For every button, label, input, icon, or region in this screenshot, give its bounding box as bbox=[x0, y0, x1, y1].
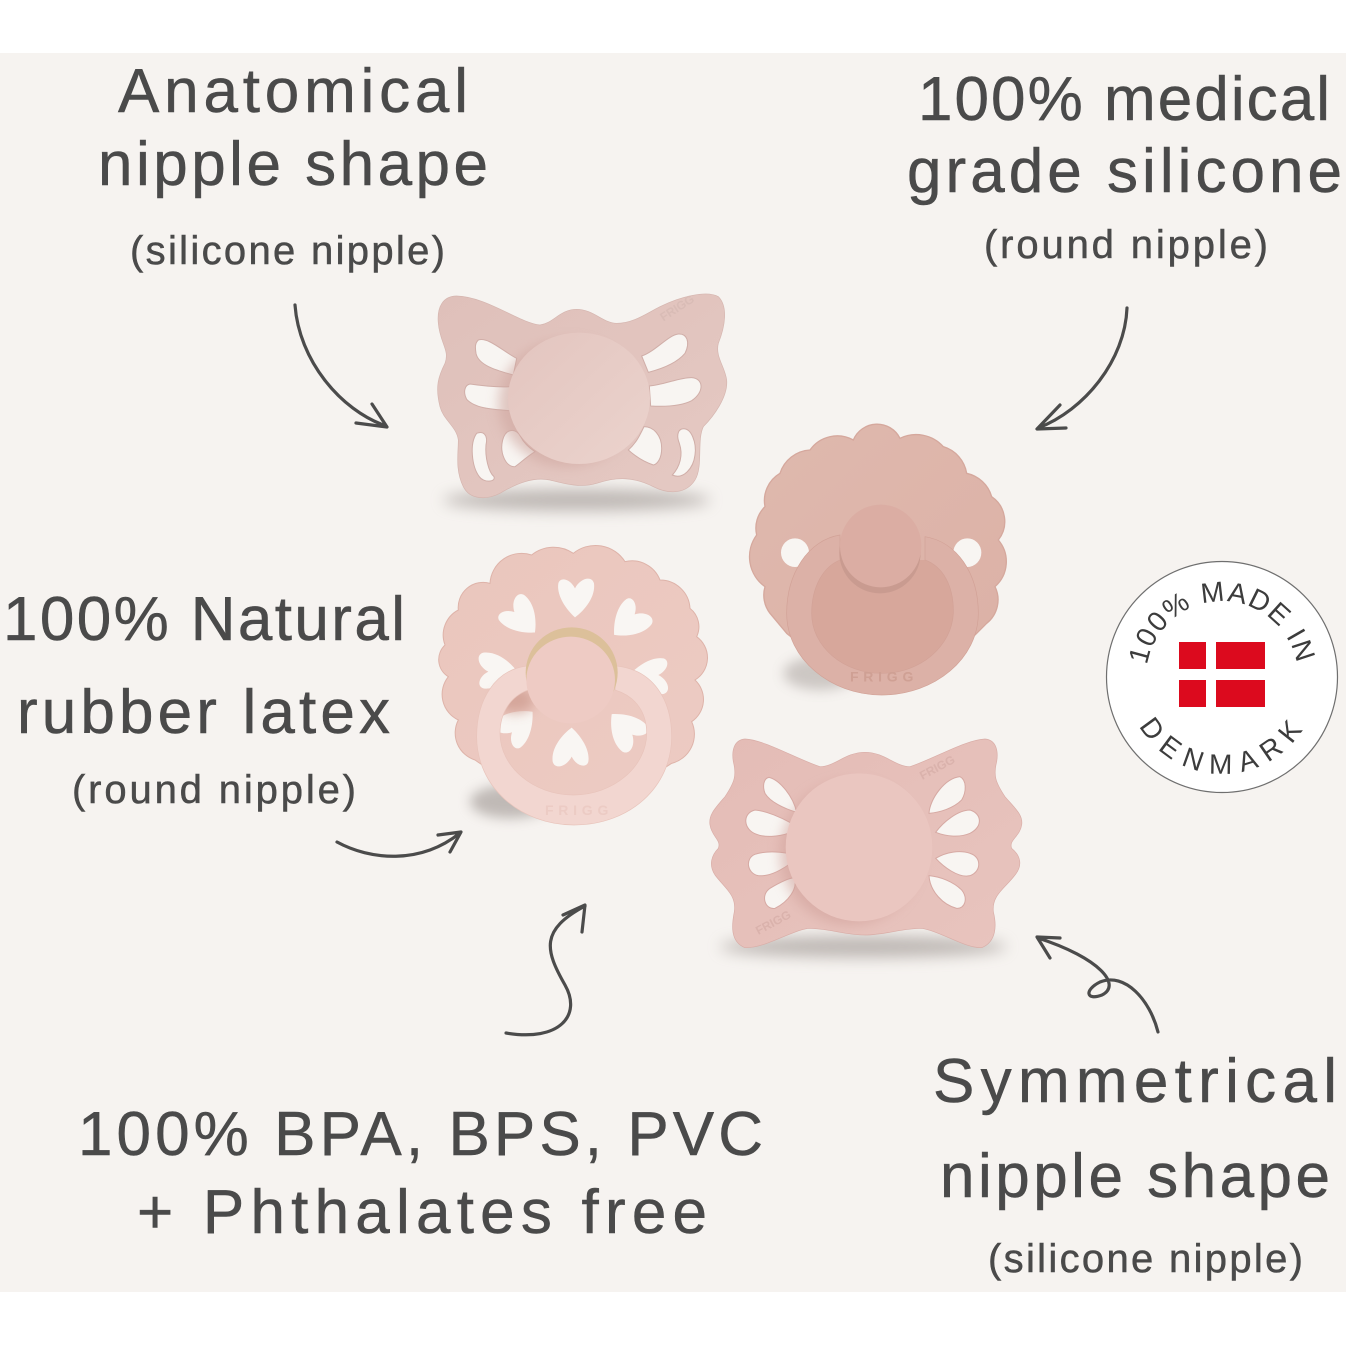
shield bbox=[750, 424, 1006, 673]
arrow: to butterfly pacifier bbox=[295, 305, 387, 427]
pacifier: butterfly bbox=[438, 292, 727, 511]
heading: BPA free: 100% BPA, BPS, PVC bbox=[78, 1100, 763, 1169]
button bbox=[526, 637, 615, 723]
heading: medical grade silicone: 100% medical bbox=[918, 65, 1330, 134]
arrow: to centre pacifiers bbox=[506, 905, 585, 1035]
shadow bbox=[720, 936, 1007, 957]
shadow bbox=[443, 489, 710, 511]
logo: FRIGG bbox=[850, 669, 913, 685]
badge top text: 100% MADE IN bbox=[1130, 582, 1315, 663]
badge circle bbox=[1106, 562, 1338, 792]
heading: medical grade silicone: (round nipple) bbox=[984, 223, 1268, 267]
nipple base bbox=[508, 333, 650, 464]
shield bbox=[710, 739, 1022, 948]
heading: anatomical nipple shape: (silicone nipple) bbox=[130, 229, 445, 273]
cut-outs bbox=[465, 334, 701, 481]
heading: symmetrical nipple shape bbox=[933, 1047, 1337, 1281]
heading: symmetrical nipple shape: (silicone nipple) bbox=[988, 1237, 1303, 1281]
heading: medical grade silicone: grade silicone bbox=[907, 137, 1342, 206]
heading: BPA free: + Phthalates free bbox=[137, 1178, 707, 1247]
pacifier: daisy bbox=[750, 424, 1006, 695]
arrow: to daisy pacifier bbox=[1037, 308, 1127, 429]
shadow bbox=[470, 785, 550, 818]
arrow: to symmetrical pacifier bbox=[1037, 937, 1158, 1032]
nipple shadow bbox=[498, 340, 635, 467]
pacifier: symmetrical bbox=[710, 739, 1022, 957]
heading: natural rubber latex bbox=[3, 585, 405, 812]
inner ring area bbox=[812, 560, 953, 673]
logo: FRIGG bbox=[657, 292, 697, 324]
heading: symmetrical nipple shape: nipple shape bbox=[940, 1142, 1330, 1211]
heading: medical grade silicone bbox=[907, 65, 1342, 267]
shield bbox=[439, 545, 707, 796]
latex stem bbox=[526, 627, 618, 718]
badge: made in Denmark bbox=[1106, 560, 1338, 794]
handle ring bbox=[787, 535, 978, 695]
nipple shadow bbox=[780, 782, 920, 925]
nipple base bbox=[786, 773, 932, 921]
heading: anatomical nipple shape: Anatomical bbox=[118, 57, 468, 126]
handle ring bbox=[477, 666, 672, 825]
inner shadow under button bbox=[495, 687, 535, 713]
logo: FRIGG bbox=[545, 802, 608, 818]
shadow bbox=[783, 657, 857, 690]
side holes bbox=[781, 538, 809, 567]
button bbox=[840, 505, 921, 587]
pacifier: heart lace bbox=[439, 545, 707, 825]
heading: natural rubber latex: 100% Natural bbox=[3, 585, 405, 654]
badge bottom text: DENMARK bbox=[1140, 716, 1303, 774]
heading: symmetrical nipple shape: Symmetrical bbox=[933, 1047, 1337, 1116]
cut-outs bbox=[746, 777, 979, 908]
Danish flag bbox=[1179, 642, 1265, 707]
logo bottom: FRIGG bbox=[753, 907, 793, 938]
arrow: to heart pacifier bbox=[337, 832, 461, 856]
heading: natural rubber latex: rubber latex bbox=[17, 678, 390, 747]
heading: BPA free bbox=[78, 1100, 763, 1247]
heading: natural rubber latex: (round nipple) bbox=[72, 768, 356, 812]
logo top: FRIGG bbox=[917, 752, 957, 783]
heading: anatomical nipple shape bbox=[98, 57, 488, 273]
heart cut-outs bbox=[479, 579, 668, 766]
heading: anatomical nipple shape: nipple shape bbox=[98, 130, 488, 199]
shield bbox=[438, 294, 727, 498]
button side bbox=[839, 512, 921, 593]
